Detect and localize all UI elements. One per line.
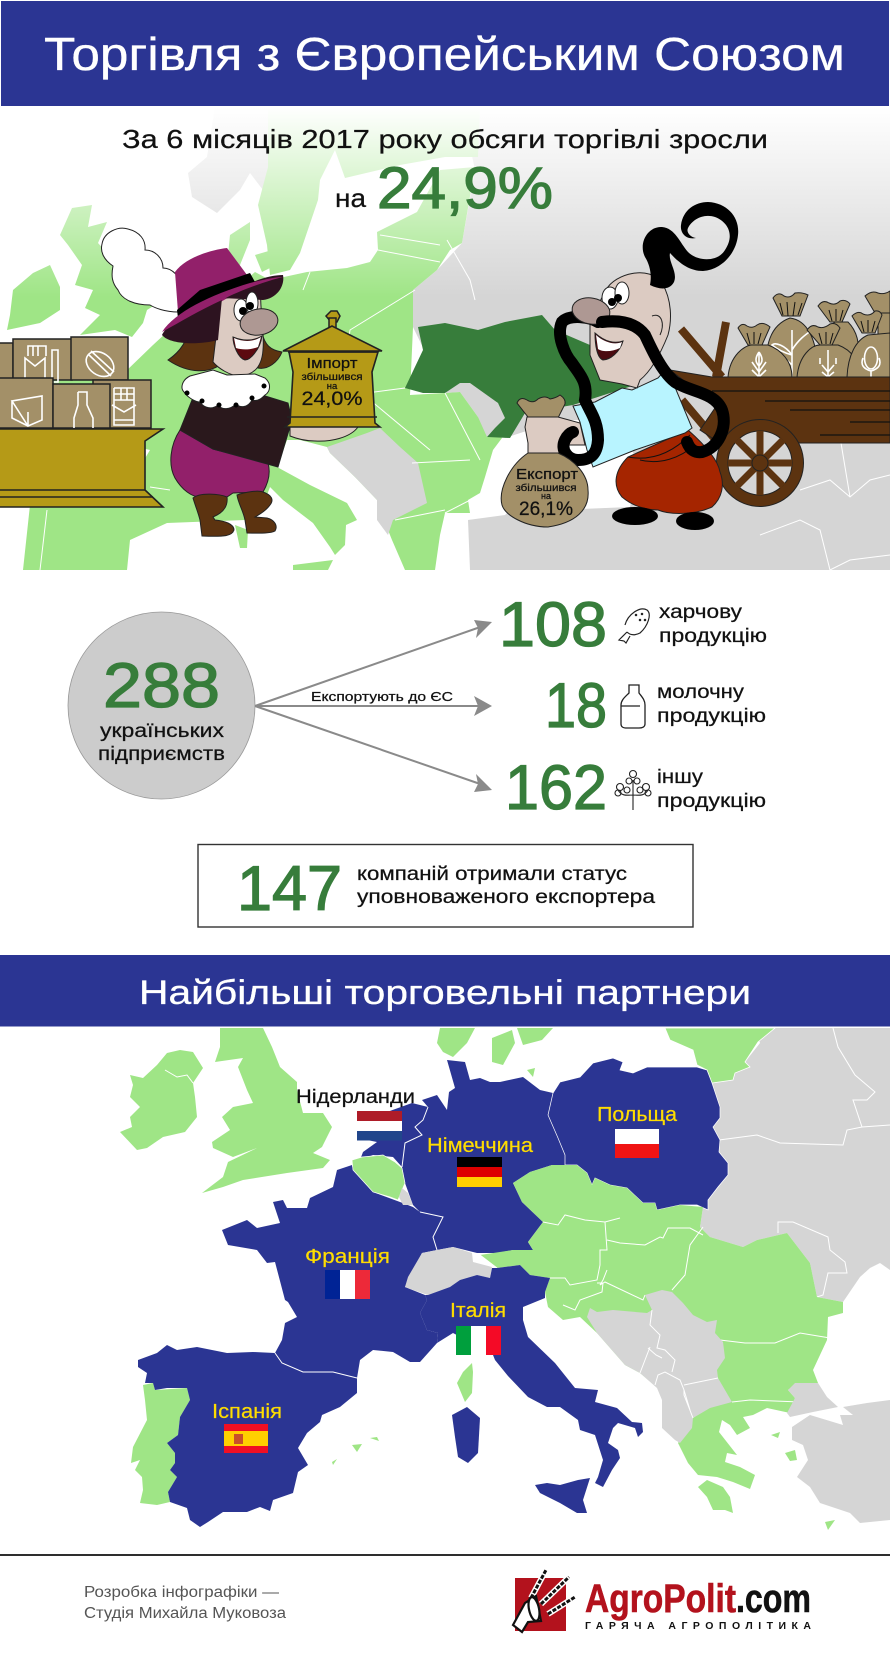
cart body	[670, 370, 890, 443]
boots	[612, 507, 714, 530]
cart with sacks of grain	[670, 291, 890, 506]
nose	[238, 306, 280, 338]
bag neck	[517, 395, 565, 418]
crate: coffee bean	[71, 337, 128, 382]
stat: 18 dairy: 18	[545, 671, 607, 741]
western and central Europe	[23, 167, 502, 570]
left hair	[168, 305, 221, 371]
trousers	[616, 430, 722, 513]
title: Торгівля з Європейським Союзом	[44, 28, 845, 80]
Central and south-east Europe	[480, 1165, 843, 1489]
collar	[182, 370, 270, 409]
chest text: 24,0%	[302, 389, 363, 410]
Poland	[548, 1058, 728, 1210]
Ukraine	[405, 315, 635, 438]
shirt	[573, 368, 692, 467]
Baltic states	[665, 1028, 775, 1083]
arrows	[255, 620, 492, 792]
label: Netherlands	[296, 1086, 415, 1140]
bag text: Експорт	[516, 467, 578, 483]
sack: back centre	[765, 293, 818, 377]
box: authorised exporters: уповноваженого експортера	[357, 886, 655, 908]
logo icon	[513, 1570, 575, 1632]
section banner	[0, 955, 890, 1026]
Balearic islands	[332, 1437, 379, 1465]
hat band	[177, 273, 255, 318]
icon: milk bottle	[621, 685, 645, 728]
label: France	[305, 1246, 390, 1299]
Sweden and Finland	[258, 107, 480, 275]
bag text: збільшився	[516, 482, 576, 494]
hero panel: map of Europe with characters	[0, 107, 890, 570]
icon: plant	[615, 770, 651, 810]
logo wordmark: AgroPolit	[585, 1577, 736, 1621]
sack: rye	[797, 324, 860, 377]
bag text: на	[541, 491, 551, 501]
chest text: Імпорт	[306, 356, 358, 372]
gold stand	[0, 429, 163, 507]
title banner	[1, 1, 889, 106]
Corsica	[457, 1363, 473, 1402]
mouth	[233, 336, 262, 360]
western German border	[402, 1107, 443, 1250]
bag text: 26,1%	[519, 499, 573, 520]
Netherlands	[360, 1103, 428, 1167]
crate: cigarettes	[13, 339, 72, 382]
sack: far right	[865, 291, 890, 336]
label: Spain	[212, 1401, 282, 1453]
Great Britain	[202, 1028, 332, 1193]
hat brim top	[162, 277, 283, 332]
circle: 288 enterprises: українських	[100, 720, 224, 742]
credits: Розробка інфографіки —	[84, 1584, 280, 1601]
label: Germany	[427, 1135, 534, 1187]
stat: 108 food	[499, 590, 767, 660]
partners map	[120, 1028, 890, 1530]
Norway	[188, 143, 268, 213]
Turkey	[787, 1383, 890, 1523]
label: Poland	[597, 1104, 678, 1158]
top white fade	[0, 107, 890, 297]
stat: 18 dairy: продукцію	[657, 705, 766, 727]
stat: 162 other: 162	[505, 753, 607, 823]
label: Italy	[450, 1300, 506, 1355]
cart shafts	[681, 322, 726, 445]
credits	[84, 1584, 286, 1622]
Belgium	[352, 1155, 405, 1200]
chest text: на	[327, 381, 338, 392]
label: Germany: Німеччина	[427, 1135, 534, 1157]
box: authorised exporters: 147	[237, 854, 342, 924]
Northern Ireland border	[165, 1070, 193, 1083]
right hair	[258, 333, 282, 368]
chest text	[302, 356, 363, 410]
stat: 108 food: 108	[499, 590, 607, 660]
trousers	[171, 430, 269, 497]
arrow label: Експортують до ЄС	[311, 689, 453, 704]
hand	[290, 427, 358, 441]
head	[590, 273, 670, 388]
circle: 288 enterprises	[68, 612, 255, 799]
circle: 288 enterprises: 288	[103, 651, 220, 721]
fist	[525, 417, 585, 455]
Balkan borders	[640, 1310, 718, 1418]
logo wordmark: .com	[736, 1577, 811, 1621]
forelock	[643, 202, 738, 288]
Corsica	[235, 525, 248, 548]
hero map of Europe	[0, 107, 890, 570]
map borders	[40, 235, 890, 570]
France	[222, 1165, 443, 1378]
footer	[0, 1555, 890, 1632]
character: European musketeer	[101, 228, 358, 536]
label: Poland: Польща	[597, 1104, 678, 1126]
crate: back left	[0, 343, 13, 379]
statistics panel	[68, 590, 767, 927]
Ireland	[120, 1050, 203, 1150]
moustache left strand	[560, 317, 598, 460]
Denmark	[228, 222, 270, 272]
wheel	[716, 420, 804, 506]
Peloponnese	[698, 1480, 733, 1513]
feather	[101, 228, 190, 312]
central borders	[480, 1215, 830, 1402]
eastern grey land	[413, 107, 890, 570]
Germany	[402, 1060, 565, 1253]
section heading: Найбільші торговельні партнери	[139, 974, 751, 1012]
Switzerland	[405, 1247, 492, 1295]
label: Netherlands: Нідерланди	[296, 1086, 415, 1108]
moustache right strand	[602, 321, 724, 452]
crate: cheese	[0, 378, 53, 428]
eyes	[602, 282, 629, 309]
Spain	[138, 1345, 357, 1527]
subtitle: За 6 місяців 2017 року обсяги торгівлі зросли	[122, 124, 768, 154]
crate: bottle	[53, 384, 110, 428]
crate: chocolate	[93, 380, 151, 428]
AgroPolit logo	[513, 1570, 811, 1632]
stat: 162 other: іншу	[657, 766, 703, 788]
hat crown	[175, 248, 253, 320]
Ireland	[7, 265, 60, 330]
Italy	[420, 1265, 643, 1487]
icon: sausage	[619, 609, 649, 643]
headline figure: 24,9%	[377, 156, 553, 221]
credits: Студія Михайла Муковоза	[84, 1605, 286, 1622]
headline figure: на	[335, 183, 367, 213]
Portugal	[131, 1383, 190, 1505]
character: Ukrainian cossack	[501, 202, 738, 530]
hat brim	[162, 275, 283, 343]
sack: corn	[847, 311, 890, 378]
Sardinia	[452, 1407, 480, 1463]
stat: 18 dairy	[545, 671, 766, 741]
stat: 162 other: продукцію	[657, 790, 766, 812]
Denmark	[437, 1028, 475, 1057]
sack: wheat	[728, 323, 792, 377]
stat: 108 food: продукцію	[659, 625, 767, 647]
stat: 18 dairy: молочну	[657, 681, 744, 703]
Sicily	[293, 560, 333, 570]
label: France: Франція	[305, 1246, 390, 1268]
box: authorised exporters: компаній отримали статус	[357, 863, 627, 885]
crates of goods on a gold stand	[0, 337, 163, 507]
circle: 288 enterprises: підприємств	[98, 743, 225, 765]
gold chest: import grew 24.0%	[283, 311, 382, 427]
Great Britain	[60, 205, 155, 337]
boots	[193, 491, 276, 536]
label: Spain: Іспанія	[212, 1401, 282, 1423]
jacket	[180, 395, 292, 467]
Danish islands	[492, 1030, 535, 1077]
sack: back right	[818, 300, 859, 360]
Russia, Belarus, Ukraine	[700, 1028, 890, 1302]
eastern borders	[719, 1028, 890, 1297]
ear	[652, 315, 662, 335]
stat: 108 food: харчову	[659, 601, 742, 623]
mouth	[595, 333, 623, 360]
Balkans	[587, 1290, 732, 1443]
logo tagline: ГАРЯЧА АГРОПОЛІТИКА	[585, 1620, 811, 1632]
Sweden south	[517, 1028, 553, 1045]
nose	[570, 295, 612, 327]
Aegean islands	[771, 1432, 835, 1530]
Luxembourg	[399, 1188, 413, 1205]
money bag: export grew 26.1%	[501, 453, 588, 527]
Moldova	[460, 383, 505, 437]
eyes	[234, 292, 258, 321]
bag text	[516, 467, 578, 520]
Sicily	[535, 1478, 590, 1513]
face	[213, 290, 263, 376]
Pyrenees border	[275, 1353, 357, 1378]
box: authorised exporters	[198, 844, 693, 927]
sacks	[728, 291, 890, 378]
sash lines	[628, 435, 695, 462]
Balkans	[327, 428, 427, 535]
chest text: збільшився	[302, 371, 362, 383]
label: Italy: Італія	[450, 1300, 506, 1322]
stat: 162 other	[505, 753, 766, 823]
